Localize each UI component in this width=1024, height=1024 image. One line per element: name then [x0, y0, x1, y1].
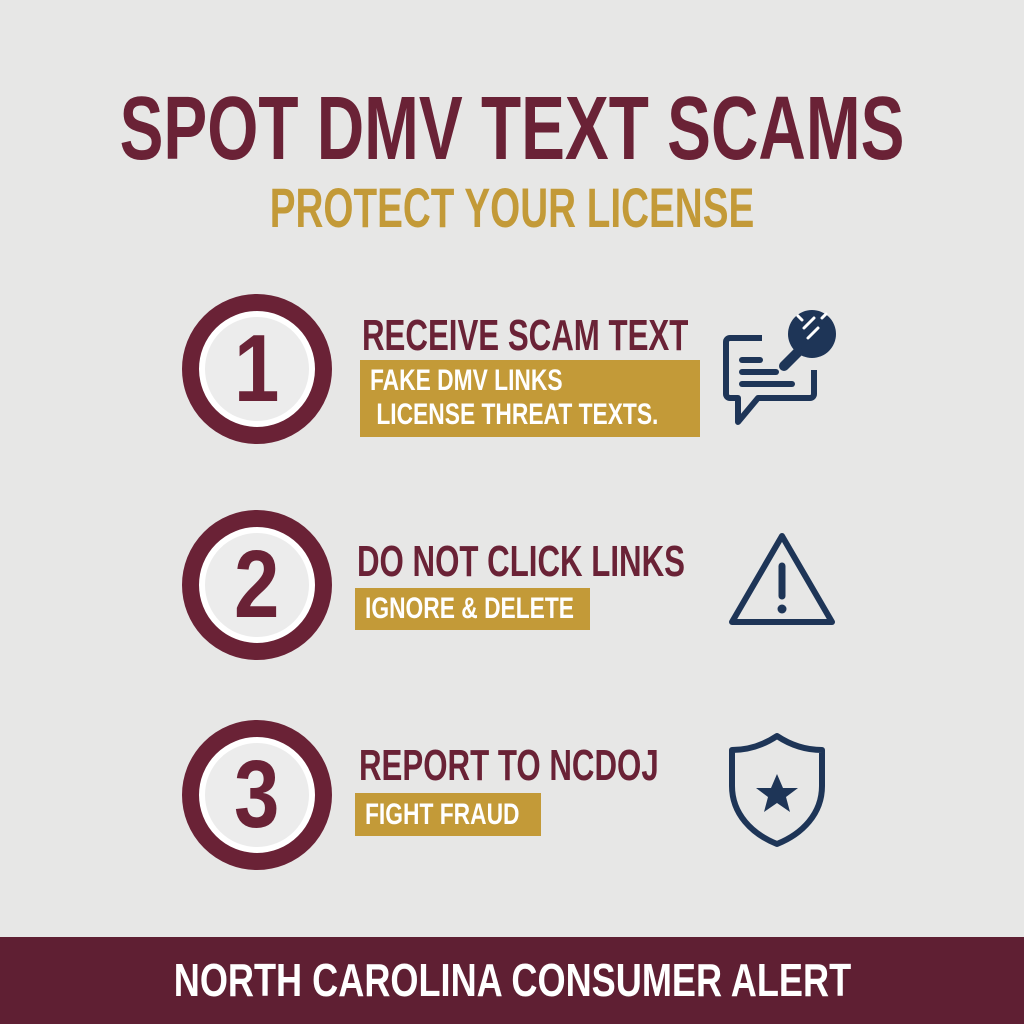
footer banner — [0, 937, 1024, 1024]
description box 1: LICENSE THREAT TEXTS. — [376, 398, 658, 431]
step 3 — [182, 720, 825, 870]
subtitle: PROTECT YOUR LICENSE — [270, 176, 754, 239]
heading 3: REPORT TO NCDOJ — [359, 741, 659, 790]
heading 1: RECEIVE SCAM TEXT — [362, 311, 688, 360]
description box 2 — [355, 588, 590, 630]
icon: warning triangle — [729, 533, 835, 625]
description box 3: FIGHT FRAUD — [365, 798, 520, 831]
number circle 1 — [182, 294, 332, 444]
number circle 1: 1 — [234, 315, 280, 422]
title: SPOT DMV TEXT SCAMS — [120, 79, 904, 179]
number circle 2: 2 — [234, 531, 280, 638]
description box 1: FAKE DMV LINKS — [370, 364, 563, 397]
step 2 — [182, 510, 835, 660]
icon: chat with broken link — [723, 310, 836, 425]
number circle 3 — [182, 720, 332, 870]
number circle 2 — [182, 510, 332, 660]
footer banner: NORTH CAROLINA CONSUMER ALERT — [173, 954, 851, 1006]
description box 1 — [360, 360, 700, 437]
step 1 — [182, 294, 836, 444]
heading 2: DO NOT CLICK LINKS — [357, 537, 685, 586]
description box 2: IGNORE & DELETE — [365, 592, 574, 625]
number circle 3: 3 — [234, 741, 280, 848]
icon: shield with star — [729, 733, 825, 847]
description box 3 — [355, 793, 541, 836]
